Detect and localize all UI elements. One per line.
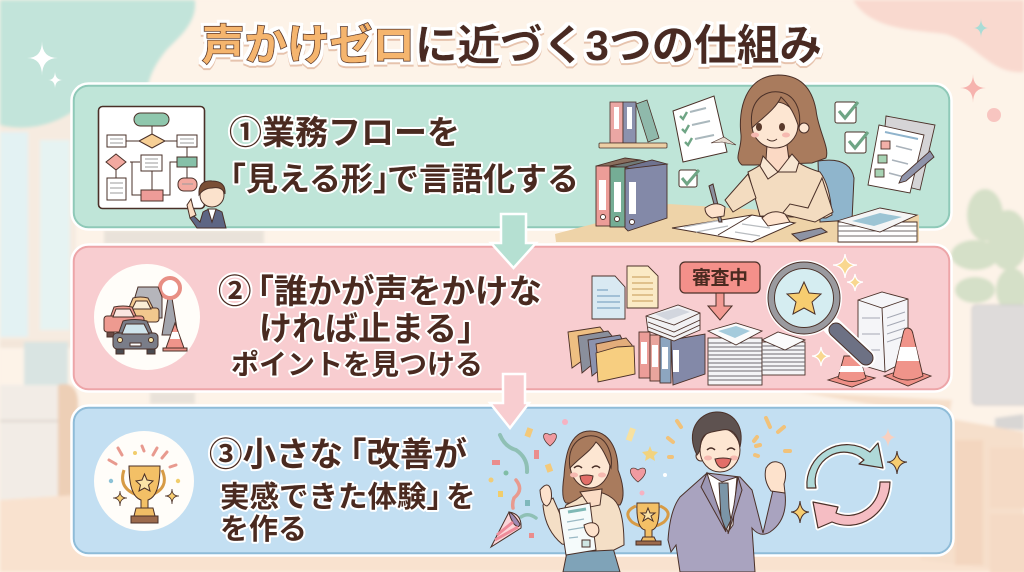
window frames between panels (104, 230, 264, 404)
shelf and cabinet at left (0, 340, 72, 500)
sparkles panel 3 (791, 428, 907, 523)
plant at right (951, 189, 1024, 312)
heading 2: ければ止まる」 (259, 310, 490, 347)
illustration: party confetti (488, 419, 667, 538)
heading 2: ②「誰かが声をかけな (218, 274, 542, 311)
illustration: notebook and pen (672, 184, 795, 242)
sparkles panel 2 (812, 254, 863, 366)
illustration: party cone (491, 512, 521, 547)
chair at left (58, 384, 78, 505)
illustration: checklist paper (673, 96, 736, 162)
illustration: paper stacks (708, 323, 805, 385)
illustration: folders (568, 327, 635, 382)
illustration: review label with arrow (680, 262, 760, 320)
arrow: step 2 to 3 (490, 374, 529, 428)
teal blob top left (0, 0, 195, 128)
icon: traffic jam circle (94, 264, 200, 370)
title: 声かけゼロに近づく3つの仕組み (202, 23, 822, 70)
desk at right (800, 392, 1024, 572)
window at left (0, 112, 76, 344)
heading 1: 「見える形」で言語化する (214, 161, 579, 197)
illustration: review label with arrow: 審査中 (692, 267, 748, 289)
sparkles top left (27, 41, 63, 89)
illustration: small trophy (628, 503, 668, 545)
star confetti (642, 446, 658, 461)
illustration: celebrating woman (540, 431, 624, 572)
panel 1: workflow (72, 75, 952, 242)
illustration: shelf binders (599, 100, 667, 148)
illustration: report with pen (868, 116, 935, 193)
icons: check boxes (679, 102, 868, 187)
panel 2 white edge (72, 244, 952, 392)
illustration: celebrating man (668, 412, 786, 572)
panel 2: find stop points (72, 244, 952, 392)
illustration: tall paper stack (858, 292, 908, 372)
monitor at right (972, 305, 1024, 430)
heading 2: ポイントを見つける (231, 349, 483, 380)
arrow: step 1 to 2 (491, 214, 536, 268)
small man pointing (187, 181, 226, 228)
heading 3: を作る (220, 513, 307, 546)
floor (0, 495, 1024, 572)
flowchart card (98, 106, 204, 208)
phone (792, 228, 827, 241)
pink blob top right (853, 0, 1024, 72)
illustration: woman writing (725, 75, 854, 222)
panel 1 background (74, 86, 950, 228)
illustration: cycle arrows (807, 443, 890, 528)
illustration: magnifier with star (766, 260, 866, 358)
illustration: traffic cones (828, 328, 931, 387)
illustration: binders with stack (639, 305, 705, 385)
illustration: documents (592, 266, 658, 319)
illustration: paper stack on desk (837, 208, 917, 242)
panel 3: small wins (72, 406, 954, 572)
heading 3: 実感できた体験」を (220, 481, 476, 514)
panel 1 white edge (72, 84, 952, 230)
panel 3 white edge (72, 406, 954, 556)
confetti and sparkles (109, 446, 180, 506)
icon: trophy circle (94, 431, 194, 531)
heading 3: ③小さな「改善が (209, 437, 467, 474)
illustration: big binders (596, 158, 667, 231)
panel 3 background (74, 408, 952, 554)
desk (555, 204, 919, 242)
panel 2 background (74, 246, 950, 390)
sparkles top right (960, 18, 1001, 122)
heading 1: ①業務フローを (229, 114, 460, 151)
burst marks around man (668, 418, 790, 457)
